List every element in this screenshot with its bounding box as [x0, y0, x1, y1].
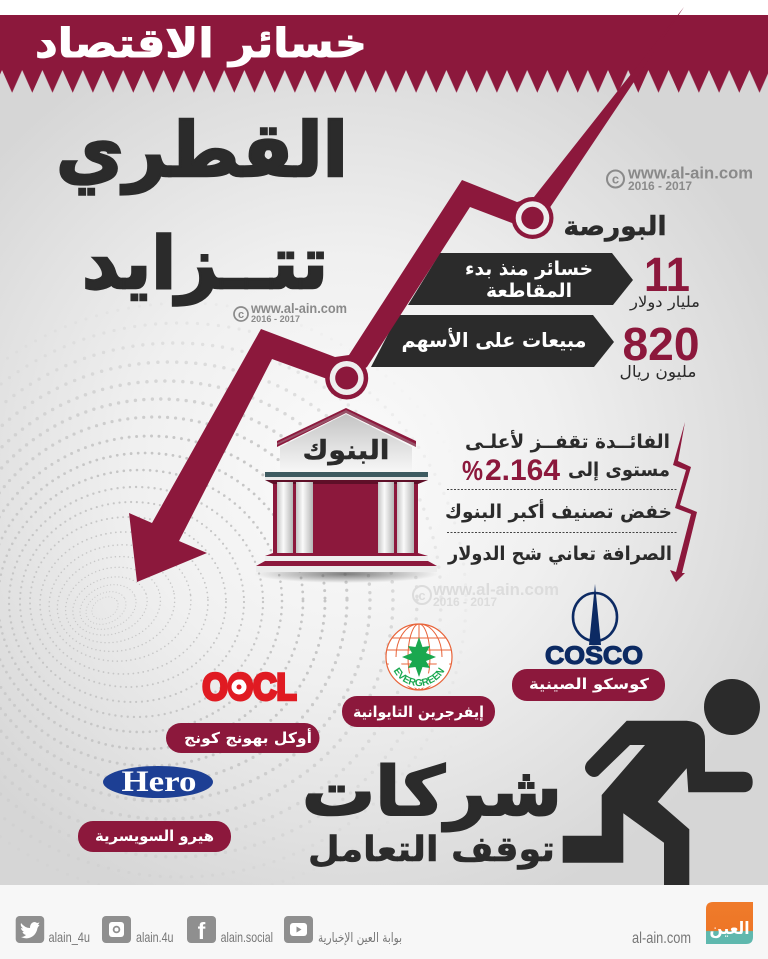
watermark top right: 2016 - 2017 [628, 179, 692, 193]
chevron: losses since boycott: خسائر منذ بدء [465, 258, 593, 280]
watermark top right [607, 164, 753, 193]
icon: facebook [187, 916, 216, 944]
label: instagram: alain.4u [136, 929, 174, 945]
watermark middle: 2016 - 2017 [251, 314, 300, 325]
watermark top right: c [612, 172, 619, 186]
text: interest jumps: الفائــدة تقفــز لأعلـى [465, 430, 670, 453]
label: twitter: alain_4u [48, 929, 90, 945]
label: OOCL Hong Kong [166, 723, 320, 753]
marker: banks ring [325, 356, 368, 400]
label: website: al-ain.com [632, 930, 691, 947]
label: COSCO China: كوسكو الصينية [529, 675, 649, 693]
watermark middle: c [238, 309, 244, 321]
stat: 820 million riyals: مليون ريال [620, 362, 696, 382]
halftone swirl background [0, 322, 456, 858]
logo: Evergreen [385, 623, 453, 691]
icon: instagram [102, 916, 131, 943]
logo: Al-Ain: العين [710, 919, 750, 939]
text: interest jumps: 2.164 [485, 454, 560, 487]
logo: Evergreen: EVERGREEN [394, 667, 444, 686]
watermark middle [234, 300, 347, 325]
bank label: البنوك [302, 436, 390, 466]
icon: facebook: f [198, 918, 206, 944]
text: interest jumps: % [462, 455, 483, 486]
heading: companies stop dealing [302, 753, 562, 870]
logo: Hero: Hero [122, 765, 196, 798]
watermark faint [413, 580, 559, 609]
title: القطري تتزايد: القطري [56, 106, 348, 195]
stat: 11 billion dollars: مليار دولار [629, 293, 700, 311]
heading: companies stop dealing: توقف التعامل [308, 830, 555, 870]
watermark faint: c [418, 588, 426, 603]
label: Evergreen Taiwan [342, 696, 495, 727]
heading: stock exchange: البورصة [564, 212, 666, 242]
watermark middle: www.al-ain.com [250, 300, 347, 316]
chevron: share sales: مبيعات على الأسهم [402, 327, 586, 352]
label: COSCO China [512, 669, 665, 701]
stat: 11 billion dollars: 11 [644, 249, 690, 302]
heading: companies stop dealing: شركات [302, 753, 562, 832]
label: youtube: بوابة العين الإخبارية [318, 931, 402, 946]
icon: twitter [16, 916, 44, 943]
icon: youtube [284, 916, 313, 943]
watermark top right: www.al-ain.com [627, 164, 753, 182]
label: OOCL Hong Kong: أوكل بهونج كونج [184, 728, 312, 747]
watermark faint: 2016 - 2017 [433, 597, 497, 609]
logo: COSCO: COSCO [545, 642, 643, 670]
label: Hero Switzerland [78, 821, 231, 852]
text: dollar shortage: الصرافة تعاني شح الدولار [447, 543, 672, 565]
falling trend arrow [129, 7, 684, 582]
marker: stock exchange ring [512, 197, 554, 239]
chevron: share sales [371, 315, 614, 367]
logo: OOCL: OOCL [202, 666, 296, 708]
text: interest jumps [462, 430, 670, 487]
header band [0, 15, 768, 93]
chevron: losses since boycott [408, 253, 633, 305]
panel: bank losses text [445, 422, 697, 582]
stat: 820 million riyals: 820 [622, 318, 700, 370]
text: interest jumps: مستوى إلى [568, 459, 670, 481]
panel: stock exchange [371, 212, 700, 382]
title: القطري تتزايد: تتــزايد [82, 221, 328, 306]
stat: 11 billion dollars [629, 249, 700, 311]
footer [0, 885, 768, 959]
label: Hero Switzerland: هيرو السويسرية [95, 827, 214, 845]
text: ratings downgrade: خفض تصنيف أكبر البنوك [445, 499, 672, 523]
watermark faint: www.al-ain.com [432, 580, 559, 599]
icon: running man [563, 679, 760, 885]
logo: Al-Ain [706, 902, 753, 944]
label: Evergreen Taiwan: إيفرجرين التايوانية [353, 703, 484, 721]
label: facebook: alain.social [221, 929, 273, 945]
icon: bank building [254, 408, 438, 583]
chevron: losses since boycott: المقاطعة [486, 280, 572, 302]
logo: COSCO [545, 584, 643, 670]
header title: خسائر الاقتصاد [35, 21, 367, 67]
logo: Hero [103, 765, 213, 798]
title: القطري تتزايد [56, 106, 348, 306]
arrow: zigzag down [670, 422, 697, 582]
